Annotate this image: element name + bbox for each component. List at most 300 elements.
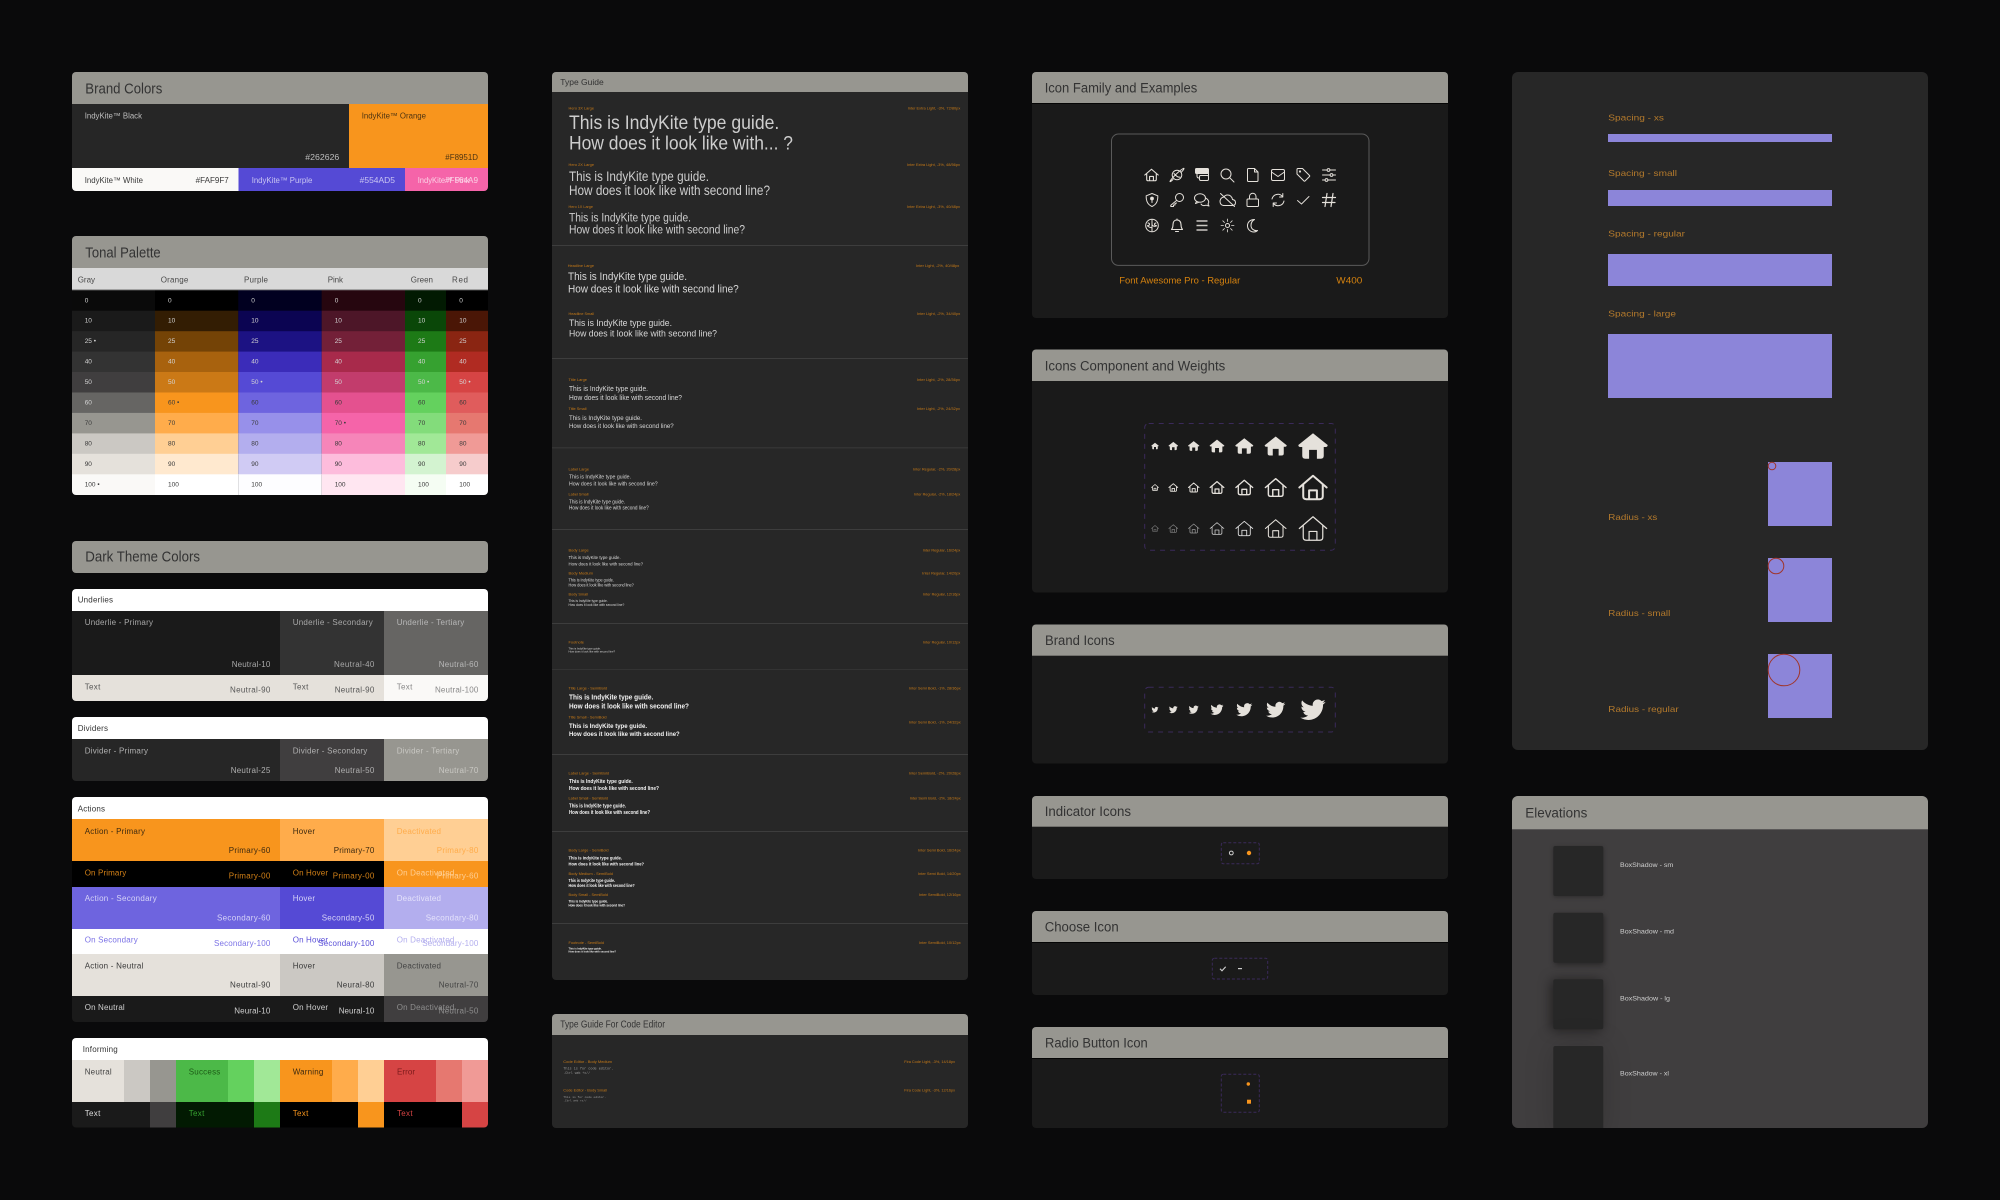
type sample: body medium semibold: How does it look like with second line? <box>568 883 635 888</box>
tonal column: pink: 90 <box>335 461 342 468</box>
tonal column: gray: 40 <box>85 359 92 366</box>
icon: bars <box>1196 221 1208 230</box>
underlie swatch: primary <box>72 611 280 701</box>
divider swatch: tertiary <box>384 739 488 781</box>
elevation: xl <box>1553 1046 1669 1136</box>
tonal column: pink <box>322 290 405 495</box>
type sample: title small: This is IndyKite type guide. <box>569 415 642 422</box>
radius: small: Radius - small <box>1608 608 1670 618</box>
tonal column: orange: 90 <box>168 461 176 468</box>
swatch: IndyKite pink: IndyKite™ Pink <box>418 176 471 185</box>
tonal column: orange: 60 • <box>168 400 180 406</box>
type sample: hero 1x large <box>568 204 960 236</box>
type sample: label small semibold: How does it look like with second line? <box>569 810 650 816</box>
underlie swatch: secondary: Neutral-90 <box>335 686 375 695</box>
tonal column: red: 60 <box>459 400 467 406</box>
underlie swatch: primary: Text <box>85 682 101 691</box>
type sample: label small: Inter Regular, -2%, 18/24px <box>914 491 960 496</box>
type sample: body large: Body Large <box>568 547 589 552</box>
type sample: label large <box>568 466 960 488</box>
underlie swatch: tertiary: Neutral-100 <box>435 686 479 695</box>
tonal column: pink: 50 <box>335 379 342 386</box>
icon: tag <box>1297 168 1310 181</box>
type sample: headline small: How does it look like with second line? <box>569 329 717 340</box>
action row: neutral: Deactivated <box>397 961 441 970</box>
type sample: body medium semibold: Inter Semi Bold, 14/20px <box>918 871 961 876</box>
tonal column: green: 10 <box>418 318 426 325</box>
swatch: IndyKite white <box>72 168 238 191</box>
tonal column: purple: 80 <box>251 440 259 447</box>
spacing: regular <box>1608 228 1832 286</box>
heading bar: dark theme colors: Dark Theme Colors <box>85 550 200 566</box>
code sample: body medium: This is for code editor. <box>563 1067 613 1072</box>
informing group: warning: Warning <box>293 1067 323 1076</box>
icon row: thin outline houses <box>1152 517 1327 540</box>
tonal column: gray <box>72 290 155 495</box>
tonal column: purple <box>238 290 322 495</box>
type sample: title large: Title Large <box>568 377 588 382</box>
tonal column: green: 60 <box>418 400 426 406</box>
heading: indicator icons: Indicator Icons <box>1045 804 1131 819</box>
swatch: IndyKite black: #262626 <box>305 153 340 162</box>
type sample: body large semibold: This is IndyKite type guide. <box>568 856 622 862</box>
tonal column: purple: 70 <box>251 420 259 427</box>
icon: sync <box>1272 194 1284 206</box>
type sample: label small semibold: This is IndyKite type guide. <box>569 804 626 810</box>
panel: informing <box>72 1038 488 1128</box>
code sample: body small: Code Editor - Body Small <box>563 1087 607 1092</box>
icon: minus <box>1238 968 1242 969</box>
type sample: label large: Label Large <box>568 466 590 471</box>
heading: dividers: Dividers <box>78 724 108 733</box>
type sample: label small: This is IndyKite type guide. <box>569 500 625 506</box>
divider swatch: tertiary: Neutral-70 <box>439 766 479 775</box>
type sample: label small semibold: Label Small - SemiBold <box>568 796 608 801</box>
tonal column: purple: 0 <box>251 297 255 304</box>
action row: secondary: Action - Secondary <box>85 894 157 903</box>
type sample: headline small: This is IndyKite type guide. <box>569 318 672 329</box>
dashed frame: radio <box>1221 1074 1259 1112</box>
tonal column: gray: 0 <box>85 297 89 304</box>
type sample: hero 1x large: How does it look like with second line? <box>569 224 745 236</box>
action row: secondary: Secondary-80 <box>426 913 479 922</box>
type sample: title large semibold <box>568 685 961 710</box>
radius: small <box>1608 558 1832 622</box>
type sample: label large semibold: Inter SemiBold, -2%, 20/28px <box>909 771 961 776</box>
panel: indicator icons <box>1032 796 1448 879</box>
tonal column: green <box>405 290 446 495</box>
panel: elevations <box>1512 796 1928 1136</box>
type sample: label large semibold: How does it look like with second line? <box>569 786 659 792</box>
column headers <box>72 268 488 290</box>
tonal column: gray: 90 <box>85 461 92 468</box>
elevation: xl: BoxShadow - xl <box>1620 1071 1669 1078</box>
column headers: Purple <box>244 275 269 284</box>
underlie swatch: tertiary: Underlie - Tertiary <box>397 618 464 627</box>
action row: on primary: Primary-60 <box>437 872 479 881</box>
tonal column: pink: 80 <box>335 440 342 447</box>
action row: primary: Primary-80 <box>437 846 479 855</box>
tonal column: red: 10 <box>459 318 467 325</box>
type sample: title large semibold: Title Large - SemiBold <box>568 685 607 690</box>
type sample: title large semibold: Inter Semi Bold, -1%, 28/36px <box>909 685 961 690</box>
informing group: neutral <box>72 1060 176 1128</box>
code sample: body medium: .Ctrl web +x// <box>563 1071 590 1076</box>
swatch: IndyKite pink <box>405 168 488 191</box>
type sample: hero 3x large: Inter Extra Light, -3%, 72/80px <box>908 105 960 110</box>
type sample: headline large: This is IndyKite type guide. <box>568 271 687 283</box>
underlie swatch: secondary: Text <box>293 682 309 691</box>
action row: primary: Deactivated <box>397 827 441 836</box>
heading: actions: Actions <box>78 804 105 813</box>
action row: on secondary: Secondary-100 <box>318 939 375 948</box>
swatch: IndyKite orange <box>349 104 488 168</box>
panel: icon family and examples <box>1032 72 1448 318</box>
type sample: footnote: Inter Regular, 10/12px <box>923 640 960 645</box>
type sample: hero 2x large: Hero 2X Large <box>568 162 595 167</box>
icon: planet <box>1170 168 1184 182</box>
tonal column: orange: 40 <box>168 359 176 366</box>
underlie swatch: primary: Underlie - Primary <box>85 618 153 627</box>
type sample: title large: Inter Light, -2%, 28/36px <box>917 377 960 382</box>
type sample: hero 1x large: Inter Extra Light, -3%, 40/48px <box>907 204 960 209</box>
type sample: body large semibold: Inter Semi Bold, 16/24px <box>918 848 961 853</box>
column headers: Pink <box>328 275 344 284</box>
type sample: headline large: Headline Large <box>568 263 595 268</box>
type sample: hero 1x large: This is IndyKite type guide. <box>569 213 691 225</box>
icon: sun <box>1221 219 1234 232</box>
type sample: body medium: Inter Regular, 14/20px <box>922 571 960 576</box>
panel: type guide <box>552 72 968 980</box>
code sample: body medium: Code Editor - Body Medium <box>563 1059 613 1064</box>
informing group: warning <box>280 1060 384 1128</box>
action row: secondary: Hover <box>293 894 315 903</box>
type sample: label large semibold: Label Large - SemiBold <box>568 771 609 776</box>
swatch: IndyKite purple <box>238 168 405 191</box>
type sample: body large semibold: How does it look like with second line? <box>568 862 644 868</box>
action row: secondary: Secondary-50 <box>322 913 375 922</box>
type sample: footnote semibold: Footnote - SemiBold <box>568 940 604 945</box>
tonal column: green: 90 <box>418 461 426 468</box>
tonal column: gray: 10 <box>85 318 92 325</box>
code sample: body medium <box>563 1059 955 1076</box>
panel: brand colors <box>72 72 488 191</box>
informing group: warning: Text <box>293 1109 309 1118</box>
action row: primary: Action - Primary <box>85 827 145 836</box>
type sample: title large semibold: This is IndyKite type guide. <box>569 692 653 701</box>
dashed frame: weights <box>1145 424 1335 550</box>
tonal column: red: 25 <box>459 338 467 345</box>
tonal column: pink: 25 <box>335 338 342 345</box>
icon: filled indicator <box>1247 851 1251 855</box>
tonal column: green: 50 • <box>418 379 430 386</box>
elevation: sm <box>1553 846 1673 896</box>
type sample: body small <box>568 592 960 607</box>
type sample: title small semibold: This is IndyKite type guide. <box>569 723 647 730</box>
tonal column: red: 70 <box>459 420 467 427</box>
action row: on neutral: Neutral-50 <box>439 1006 479 1015</box>
type sample: body small: This is IndyKite type guide. <box>568 599 608 603</box>
action row: neutral: Neutral-70 <box>439 981 479 990</box>
type sample: footnote: This is IndyKite type guide. <box>568 646 601 650</box>
heading: brand icons: Brand Icons <box>1045 633 1115 648</box>
tonal column: red: 80 <box>459 440 467 447</box>
action row: on neutral: Neural-10 <box>234 1006 271 1015</box>
underlie swatch: primary: Neutral-10 <box>232 660 271 669</box>
column headers: Gray <box>78 275 95 284</box>
action row: on secondary: Secondary-100 <box>214 939 271 948</box>
radius: regular: Radius - regular <box>1608 704 1679 714</box>
type sample: title large: This is IndyKite type guide. <box>569 384 648 393</box>
swatch: IndyKite pink: #F564A9 <box>445 176 479 185</box>
action row: primary: Primary-60 <box>229 846 271 855</box>
column headers: Orange <box>161 275 189 284</box>
heading: tonal palette: Tonal Palette <box>85 245 161 261</box>
dashed frame: indicator <box>1221 843 1259 864</box>
icon: sliders <box>1322 169 1336 181</box>
heading: brand colors: Brand Colors <box>85 81 162 97</box>
panel: icons component and weights <box>1032 350 1448 592</box>
tonal column: pink: 0 <box>335 297 339 304</box>
panel: brand icons <box>1032 624 1448 764</box>
tonal column: green: 70 <box>418 420 426 427</box>
tonal column: green: 100 <box>418 481 429 488</box>
icon: empty indicator <box>1229 851 1233 855</box>
type sample: body medium: This is IndyKite type guide. <box>568 578 614 583</box>
heading: choose icon: Choose Icon <box>1045 920 1119 935</box>
informing group: error <box>384 1060 488 1128</box>
type sample: headline large <box>568 263 959 295</box>
type sample: footnote semibold: Inter SemiBold, 10/12px <box>919 940 961 945</box>
heading: icons component: Icons Component and Weights <box>1045 358 1226 373</box>
tonal column: gray: 100 • <box>85 481 100 488</box>
tonal column: orange: 70 <box>168 420 176 427</box>
underlie swatch: tertiary: Text <box>397 682 413 691</box>
action row: neutral <box>72 954 488 996</box>
action row: on neutral <box>72 996 488 1022</box>
type sample: body medium semibold: Body Medium - SemiBold <box>568 871 613 876</box>
elevation: md <box>1553 913 1675 963</box>
column headers: Red <box>452 275 468 284</box>
heading bar: dark theme colors <box>72 541 488 573</box>
tonal column: pink: 10 <box>335 318 342 325</box>
tonal column: gray: 25 • <box>85 338 97 345</box>
code sample: body small: .Ctrl web +x// <box>563 1099 587 1103</box>
icon row: bold outline houses <box>1152 476 1327 499</box>
action row: on secondary: On Deactivated <box>397 936 454 945</box>
type sample: label large semibold: This is IndyKite type guide. <box>569 779 633 785</box>
action row: on primary: On Hover <box>293 868 328 877</box>
informing group: error: Error <box>397 1067 415 1076</box>
type sample: body large <box>568 547 960 567</box>
action row: primary: Hover <box>293 827 315 836</box>
type sample: headline large: Inter Light, -2%, 40/48px <box>916 263 959 268</box>
type sample: body medium semibold: This is IndyKite type guide. <box>568 878 615 883</box>
icon: lock <box>1247 193 1258 206</box>
icon: stacked server <box>1196 168 1208 180</box>
icon: moon <box>1248 220 1258 232</box>
code sample: body small: Fira Code Light, -3%, 12/16px <box>904 1087 955 1092</box>
informing group: success <box>176 1060 280 1128</box>
swatch: IndyKite orange: IndyKite™ Orange <box>362 111 427 120</box>
swatch: IndyKite white: #FAF9F7 <box>196 176 229 185</box>
underlie swatch: secondary <box>280 611 384 701</box>
action row: on neutral: Neural-10 <box>339 1006 375 1015</box>
type sample: body large semibold: Body Large - SemiBold <box>568 848 608 853</box>
action row: on primary: Primary-00 <box>229 872 271 881</box>
tonal column: purple: 25 <box>251 338 259 345</box>
type sample: body small semibold: How does it look like with second line? <box>568 904 625 908</box>
type sample: body small: Body Small <box>568 592 588 597</box>
heading: elevations: Elevations <box>1525 806 1588 821</box>
type sample: label small: How does it look like with second line? <box>569 506 649 512</box>
informing group: success: Text <box>189 1109 205 1118</box>
type sample: title large <box>568 377 960 402</box>
type sample: title small semibold: Inter Semi Bold, -1%, 24/32px <box>909 720 961 725</box>
divider swatch: primary: Divider - Primary <box>85 746 148 755</box>
tonal column: green: 40 <box>418 359 426 366</box>
tonal column: purple: 90 <box>251 461 259 468</box>
icon: brain <box>1146 219 1158 232</box>
type sample: body small: Inter Regular, 12/16px <box>923 592 960 597</box>
radius: regular <box>1608 654 1832 718</box>
type sample: body large: Inter Regular, 16/24px <box>923 547 960 552</box>
swatch: IndyKite purple: IndyKite™ Purple <box>252 176 313 185</box>
action row: on primary <box>72 861 488 887</box>
heading: underlies: Underlies <box>78 596 113 605</box>
swatch: IndyKite purple: #554AD5 <box>360 176 396 185</box>
divider swatch: secondary: Neutral-50 <box>335 766 375 775</box>
tonal column: green: 0 <box>418 297 422 304</box>
action row: on secondary <box>72 929 488 954</box>
type sample: title small <box>568 406 960 430</box>
type sample: label large: This is IndyKite type guide. <box>569 475 631 481</box>
swatch: IndyKite white: IndyKite™ White <box>85 176 144 185</box>
type sample: label small <box>568 491 960 512</box>
tonal column: gray: 70 <box>85 420 92 427</box>
type sample: title large semibold: How does it look like with second line? <box>569 701 689 710</box>
tonal column: purple: 40 <box>251 359 259 366</box>
type sample: body medium: How does it look like with second line? <box>568 583 634 588</box>
tonal column: pink: 70 • <box>335 420 347 427</box>
icon: comments <box>1194 194 1209 206</box>
icon: shield keyhole <box>1146 194 1158 206</box>
type sample: headline small <box>568 311 960 340</box>
elevation: sm: BoxShadow - sm <box>1620 862 1673 869</box>
tonal column: orange: 10 <box>168 318 176 325</box>
type sample: label large semibold <box>568 771 961 792</box>
icon: hash <box>1322 194 1336 206</box>
panel: choose icon <box>1032 911 1448 995</box>
code sample: body medium: Fira Code Light, -3%, 14/18px <box>904 1059 955 1064</box>
type sample: title large: How does it look like with second line? <box>569 393 682 402</box>
icon: key <box>1171 194 1184 206</box>
tonal column: gray: 60 <box>85 400 92 406</box>
heading: informing: Informing <box>83 1045 118 1054</box>
action row: on neutral: On Deactivated <box>397 1003 454 1012</box>
type sample: body small semibold: Body Small - SemiBold <box>568 892 608 897</box>
tonal column: gray: 50 <box>85 379 92 386</box>
divider swatch: primary: Neutral-25 <box>231 766 271 775</box>
heading: icon family: Icon Family and Examples <box>1045 80 1198 96</box>
underlie swatch: tertiary <box>384 611 488 701</box>
radius: xs <box>1608 462 1832 526</box>
type sample: footnote: How does it look like with second line? <box>568 649 615 653</box>
spacing: xs: Spacing - xs <box>1608 112 1664 122</box>
action row: on primary: Primary-00 <box>333 872 375 881</box>
type sample: label small semibold <box>568 796 961 816</box>
panel: dividers <box>72 717 488 781</box>
type sample: body small: How does it look like with second line? <box>568 603 624 607</box>
tonal column: orange: 0 <box>168 297 172 304</box>
tonal column: orange: 50 <box>168 379 176 386</box>
type sample: title small semibold: Title Small - SemiBold <box>568 715 606 720</box>
action row: on neutral: On Hover <box>293 1003 328 1012</box>
panel: spacing and radius <box>1512 72 1928 750</box>
icon row: filled houses <box>1151 433 1328 459</box>
icon: cloud slash <box>1220 194 1236 206</box>
type sample: body large semibold <box>568 848 961 868</box>
action row: on secondary: On Hover <box>293 936 328 945</box>
type sample: body small semibold: Inter SemiBold, 12/16px <box>919 892 961 897</box>
type sample: body small semibold <box>568 892 961 908</box>
heading: type guide: Type Guide <box>560 77 604 87</box>
type sample: body large: This is IndyKite type guide. <box>568 555 621 561</box>
type sample: hero 2x large: How does it look like with second line? <box>569 183 770 198</box>
tonal column: purple: 50 • <box>251 379 263 386</box>
tonal column: red: 40 <box>459 359 467 366</box>
type sample: label small: Label Small <box>568 491 589 496</box>
icon: envelope <box>1272 170 1284 180</box>
type sample: footnote semibold: This is IndyKite type guide. <box>568 947 602 951</box>
tonal column: red: 90 <box>459 461 467 468</box>
elevation: lg <box>1553 979 1671 1029</box>
tonal column: red: 50 • <box>459 379 471 386</box>
tonal column: purple: 10 <box>251 318 259 325</box>
divider swatch: primary <box>72 739 280 781</box>
type sample: body small semibold: This is IndyKite type guide. <box>568 899 608 903</box>
heading: radio button icon: Radio Button Icon <box>1045 1035 1148 1050</box>
caption: weight: W400 <box>1336 276 1362 286</box>
spacing: large: Spacing - large <box>1608 308 1676 318</box>
code sample: body small: This is for code editor. <box>563 1095 606 1099</box>
panel: underlies <box>72 589 488 701</box>
icon: radio square <box>1247 1100 1251 1104</box>
type sample: title small: Inter Light, -2%, 24/32px <box>917 406 960 411</box>
tonal column: pink: 100 <box>335 481 346 488</box>
divider swatch: secondary: Divider - Secondary <box>293 746 367 755</box>
type sample: hero 1x large: Hero 1X Large <box>568 204 594 209</box>
type sample: label large: How does it look like with second line? <box>569 482 658 488</box>
type sample: title small: Title Small <box>568 406 587 411</box>
action row: neutral: Action - Neutral <box>85 961 144 970</box>
swatch: IndyKite black: IndyKite™ Black <box>85 111 143 120</box>
tonal column: green: 25 <box>418 338 426 345</box>
informing group: neutral: Neutral <box>85 1067 112 1076</box>
caption: font awesome: Font Awesome Pro - Regular <box>1119 276 1240 286</box>
action row: neutral: Neural-80 <box>337 981 375 990</box>
spacing: small <box>1608 168 1832 206</box>
action row: neutral: Hover <box>293 961 315 970</box>
type sample: footnote semibold: How does it look like with second line? <box>568 950 616 954</box>
icon: check <box>1298 196 1309 204</box>
dashed frame: choose <box>1212 958 1268 979</box>
tonal column: pink: 40 <box>335 359 342 366</box>
informing group: success: Success <box>189 1067 220 1076</box>
elevation: md: BoxShadow - md <box>1620 929 1675 936</box>
divider swatch: tertiary: Divider - Tertiary <box>397 746 459 755</box>
type sample: headline small: Headline Small <box>568 311 594 316</box>
